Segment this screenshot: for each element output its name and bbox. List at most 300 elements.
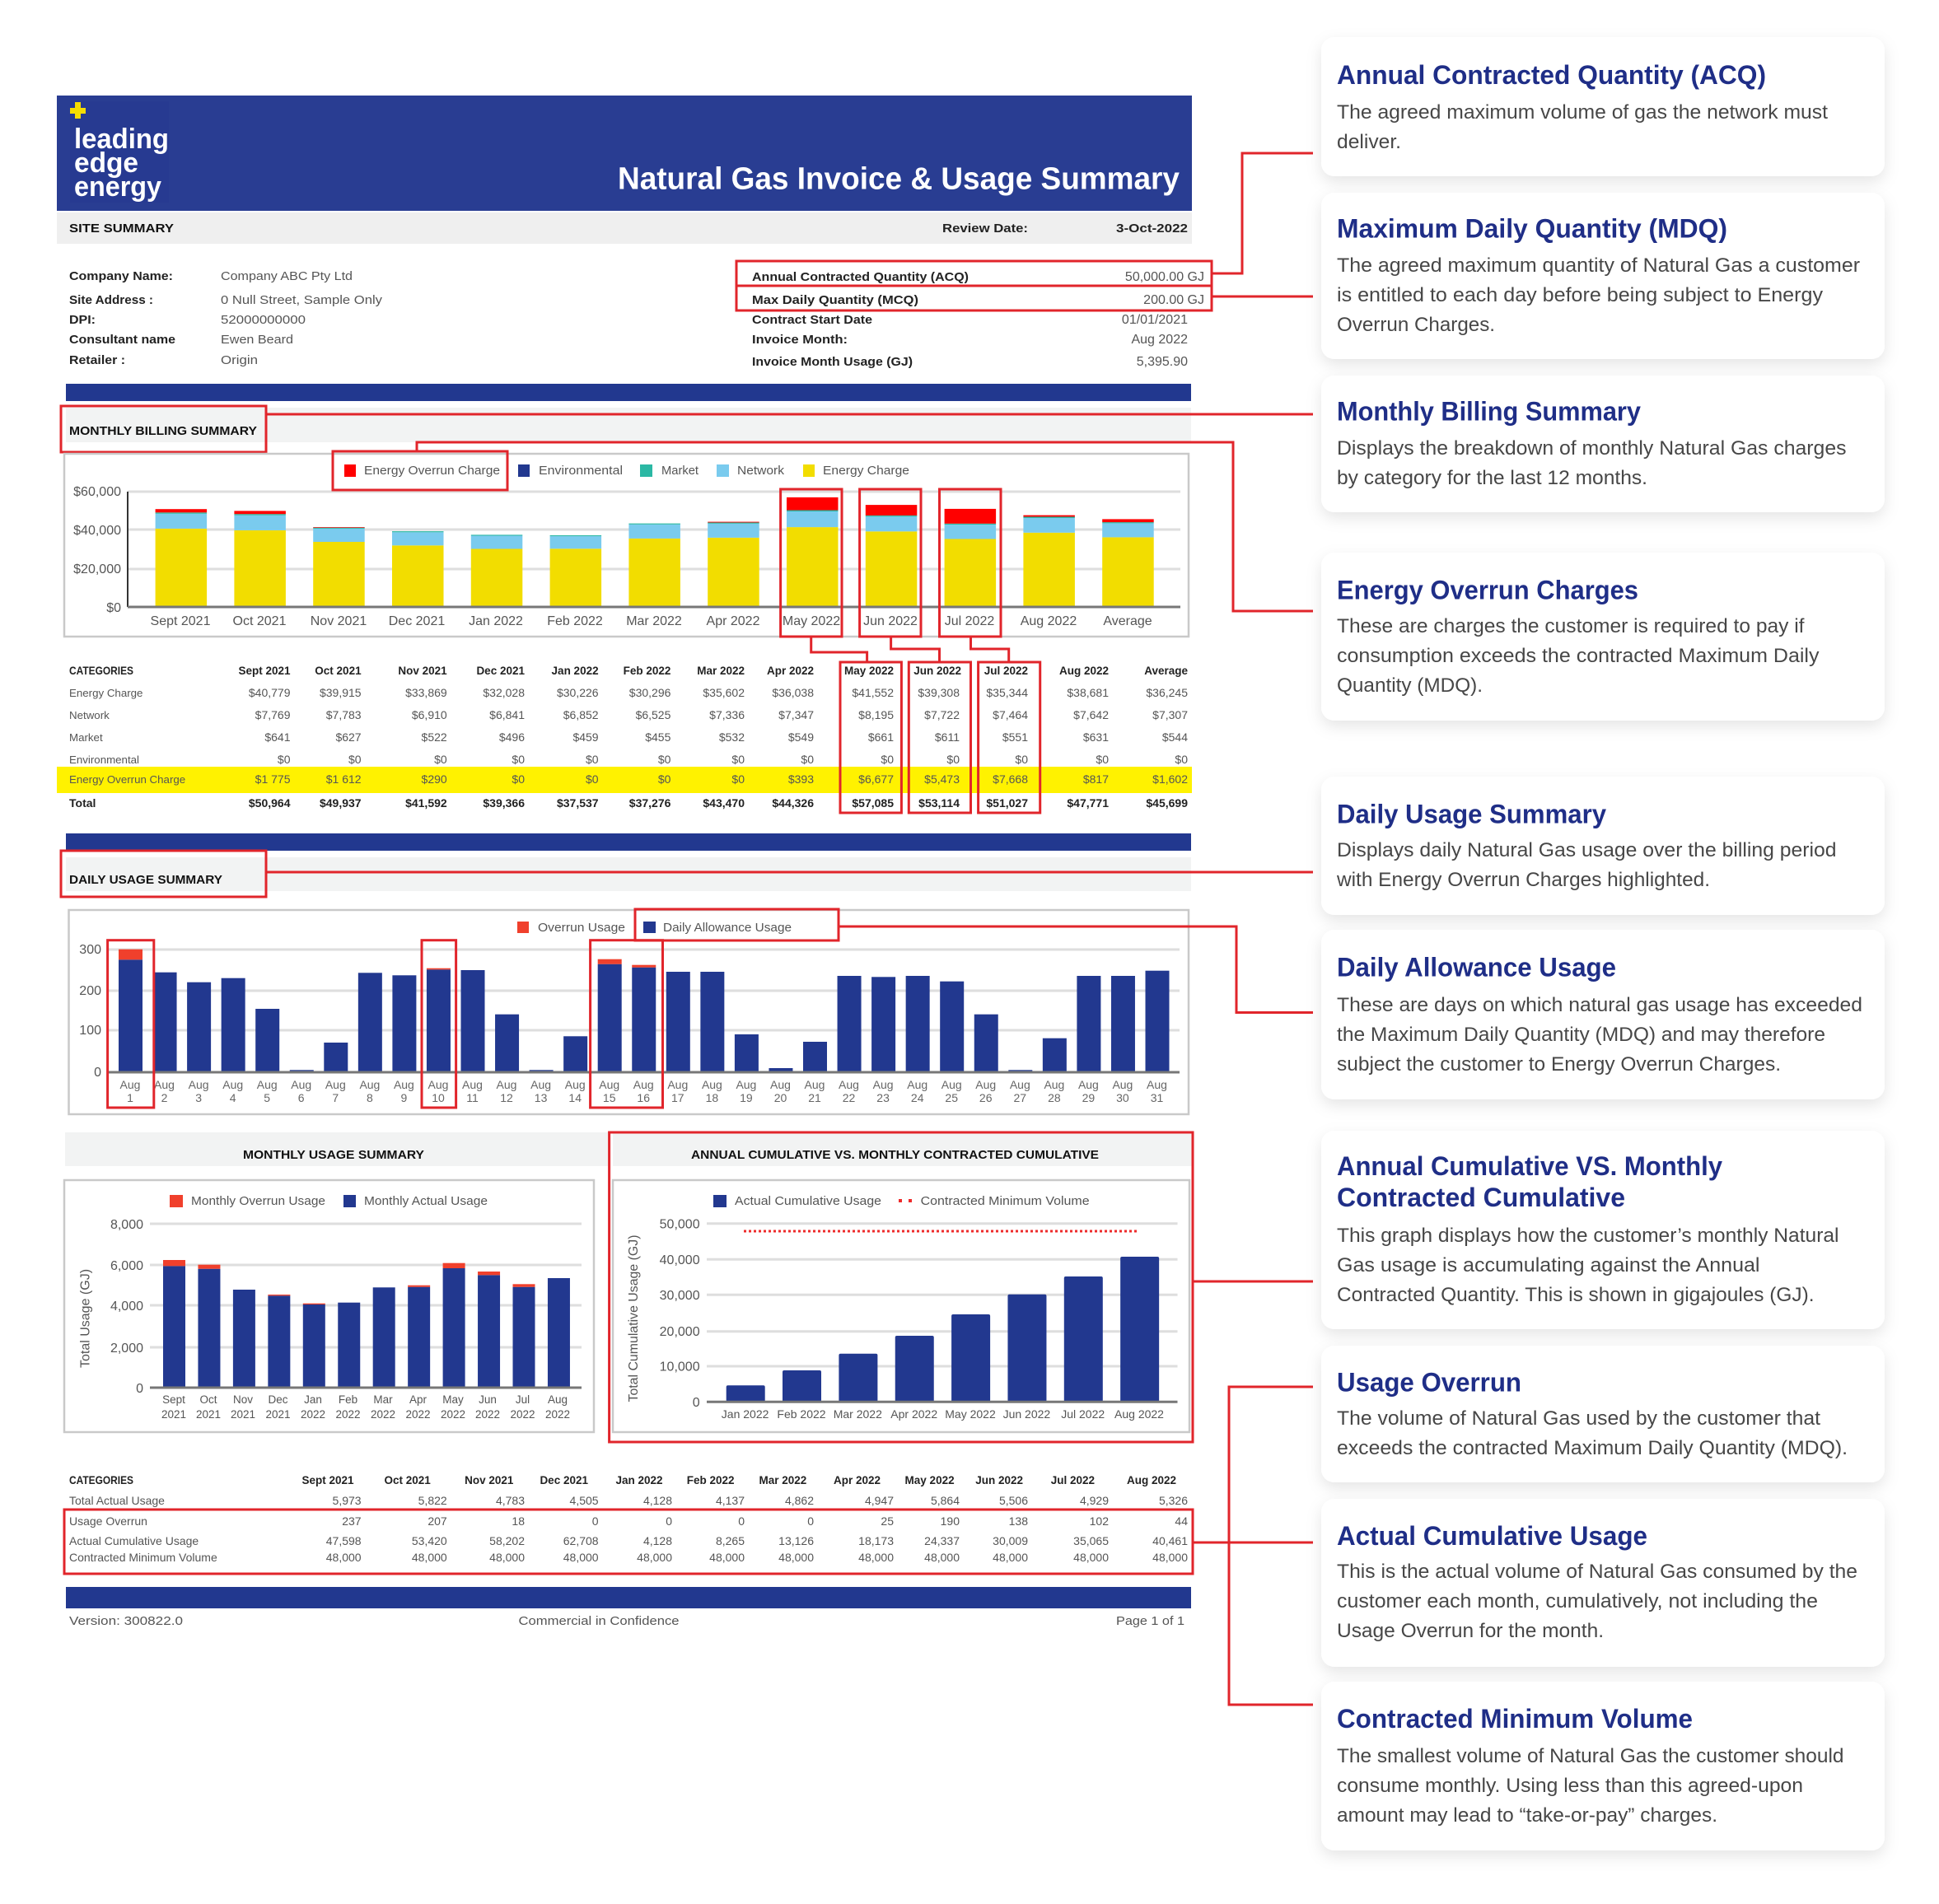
- row: environmental: [69, 753, 1188, 766]
- card: annual cumulative vs monthly contracted cumulative: [1321, 1131, 1885, 1329]
- market bars: [156, 511, 1154, 536]
- billing chart y axis labels: $60,000: [73, 485, 121, 499]
- daily chart x axis labels: 11: [466, 1091, 479, 1104]
- card: energy overrun charges: [1321, 553, 1885, 721]
- row: total: $51,027: [986, 796, 1028, 810]
- card: daily usage summary: with Energy Overrun Charges highlighted.: [1336, 869, 1710, 891]
- row: contracted minimum volume: 48,000: [637, 1551, 672, 1564]
- daily chart x axis labels: Aug: [1010, 1078, 1030, 1091]
- monthly usage x axis labels: Feb: [339, 1393, 357, 1406]
- row: usage overrun: 25: [881, 1514, 894, 1528]
- row: energy overrun charge: $1,602: [1152, 772, 1188, 786]
- site details: left column: 0 Null Street, Sample Only: [221, 293, 383, 307]
- billing table header row: Aug 2022: [1059, 665, 1109, 677]
- daily usage summary heading: [61, 851, 1191, 897]
- daily allowance usage bars: [119, 959, 1170, 1072]
- billing table header row: Average: [1144, 665, 1188, 677]
- row: network: $7,464: [993, 708, 1028, 721]
- billing chart x axis labels: Average: [1103, 614, 1152, 628]
- daily chart x axis labels: Aug: [120, 1078, 140, 1091]
- usage table header row: Apr 2022: [834, 1474, 881, 1486]
- chart: daily usage bars: [69, 910, 1189, 1114]
- cumulative x axis labels: Feb 2022: [777, 1407, 826, 1421]
- daily chart x axis labels: Aug: [1147, 1078, 1167, 1091]
- row: energy charge: $36,038: [772, 686, 814, 699]
- row: energy charge: Energy Charge: [69, 687, 143, 699]
- daily chart x axis labels: 24: [911, 1091, 924, 1104]
- daily chart x axis labels: Aug: [736, 1078, 756, 1091]
- logo: leading edge energy: leading: [74, 124, 169, 155]
- contracted minimum volume dotted line: [744, 1230, 1139, 1232]
- row: total actual usage: 4,128: [643, 1494, 672, 1507]
- chart: monthly billing stacked bars: [64, 454, 1189, 637]
- connector: daily usage heading to card: [266, 871, 1313, 873]
- row: total actual usage: 4,137: [716, 1494, 745, 1507]
- site details: right column: Annual Contracted Quantity (ACQ): [752, 270, 969, 284]
- row: network: $6,852: [563, 708, 599, 721]
- billing chart x axis labels: Jun 2022: [863, 614, 918, 628]
- card: daily allowance usage: [1321, 930, 1885, 1099]
- site details: left column: Ewen Beard: [221, 333, 293, 347]
- row: energy charge: $38,681: [1067, 686, 1109, 699]
- card: daily allowance usage: These are days on which natural gas usage has exceeded: [1337, 994, 1862, 1016]
- billing chart x axis labels: Jul 2022: [945, 614, 994, 628]
- row: total: Total: [69, 796, 96, 810]
- cumulative y axis: [627, 1217, 700, 1410]
- cumulative y axis: 0: [693, 1396, 700, 1410]
- daily chart x axis labels: 25: [945, 1091, 958, 1104]
- site summary heading band: 3-Oct-2022: [1116, 222, 1188, 236]
- row: actual cumulative usage: Actual Cumulative Usage: [69, 1534, 199, 1547]
- row: network: $7,307: [1152, 708, 1188, 721]
- daily chart x axis labels: 16: [637, 1091, 650, 1104]
- row: contracted minimum volume: Contracted Minimum Volume: [69, 1551, 217, 1564]
- billing table header row: Oct 2021: [315, 665, 362, 677]
- cumulative legend: Actual Cumulative Usage: [735, 1194, 881, 1208]
- row: total actual usage: 5,822: [418, 1494, 447, 1507]
- daily chart x axis labels: Aug: [907, 1078, 927, 1091]
- row: network: $7,336: [709, 708, 745, 721]
- daily chart y axis labels: 0: [94, 1066, 101, 1080]
- daily chart x axis labels: Aug: [770, 1078, 791, 1091]
- card: usage overrun: exceeds the contracted Maximum Daily Quantity (MDQ).: [1337, 1437, 1848, 1459]
- site details: right column: 01/01/2021: [1122, 313, 1188, 327]
- footer: Version: 300822.0: [69, 1614, 183, 1628]
- card: monthly billing summary: by category for the last 12 months.: [1337, 467, 1647, 489]
- daily chart y axis labels: 100: [79, 1024, 101, 1038]
- row: total: $39,366: [483, 796, 525, 810]
- energy overrun bars: [156, 497, 1154, 528]
- daily chart x axis labels: 10: [432, 1091, 445, 1104]
- row: environmental: $0: [512, 753, 525, 766]
- site details: right column: 200.00 GJ: [1143, 293, 1204, 307]
- row: energy charge: $41,552: [852, 686, 894, 699]
- row: environmental: $0: [434, 753, 447, 766]
- row: usage overrun: 0: [666, 1514, 672, 1528]
- connector arrows: May to Jul chart columns to table columns: [811, 637, 1009, 662]
- billing chart legend: Network: [737, 464, 785, 478]
- billing chart x axis labels: May 2022: [783, 614, 840, 628]
- cumulative y axis: Total Cumulative Usage (GJ): [627, 1235, 641, 1402]
- row: network: $6,525: [636, 708, 671, 721]
- card: actual cumulative usage: This is the actual volume of Natural Gas consumed by the: [1337, 1561, 1857, 1583]
- site details: right column: Aug 2022: [1131, 333, 1188, 347]
- cumulative x axis labels: Mar 2022: [834, 1407, 882, 1421]
- billing chart y axis labels: $20,000: [73, 562, 121, 576]
- card: actual cumulative usage: Actual Cumulative Usage: [1337, 1521, 1647, 1551]
- footer: [69, 1614, 1184, 1628]
- row: total: $50,964: [249, 796, 291, 810]
- row: contracted minimum volume: 48,000: [489, 1551, 525, 1564]
- card: contracted minimum volume: [1321, 1682, 1885, 1850]
- daily chart x axis labels: Aug: [257, 1078, 278, 1091]
- row: market: $631: [1083, 730, 1109, 744]
- billing chart legend: Market: [661, 464, 699, 478]
- row: market: $496: [499, 730, 525, 744]
- billing table header row: Feb 2022: [624, 665, 670, 677]
- monthly usage y axis: 6,000: [110, 1259, 143, 1273]
- row: actual cumulative usage: 47,598: [326, 1534, 362, 1547]
- card: annual cumulative vs monthly contracted cumulative: Contracted Quantity. This is shown in gigajoules (GJ).: [1337, 1284, 1814, 1306]
- row: energy charge: $40,779: [249, 686, 291, 699]
- card: maximum daily quantity: is entitled to each day before being subject to Energy: [1337, 284, 1823, 306]
- billing chart y axis labels: [73, 485, 121, 615]
- card: daily usage summary: Displays daily Natural Gas usage over the billing period: [1337, 839, 1837, 861]
- monthly usage x axis labels: May: [442, 1393, 464, 1406]
- row: environmental: $0: [1096, 753, 1109, 766]
- row: energy charge: $35,344: [986, 686, 1028, 699]
- row: environmental: $0: [278, 753, 291, 766]
- monthly usage x axis labels: 2022: [301, 1408, 325, 1421]
- card: usage overrun: [1321, 1346, 1885, 1482]
- site details: right column: [752, 270, 1204, 369]
- row: market: $549: [788, 730, 814, 744]
- site details: right column: Invoice Month:: [752, 333, 848, 347]
- row: actual cumulative usage: 13,126: [778, 1534, 814, 1547]
- row: environmental: $0: [731, 753, 745, 766]
- usage table header row: Jul 2022: [1051, 1474, 1095, 1486]
- cumulative y axis: 50,000: [660, 1217, 700, 1232]
- site summary heading band: [57, 212, 1192, 244]
- daily chart x axis labels: Aug: [1078, 1078, 1099, 1091]
- row: environmental: $0: [586, 753, 599, 766]
- row: actual cumulative usage: 53,420: [412, 1534, 447, 1547]
- row: total actual usage: 5,326: [1159, 1494, 1188, 1507]
- daily chart x axis labels: 23: [876, 1091, 890, 1104]
- site details: right column: 50,000.00 GJ: [1125, 270, 1204, 284]
- logo: leading edge energy: [70, 101, 169, 203]
- row: network: $7,722: [924, 708, 960, 721]
- daily chart x axis labels: Aug: [873, 1078, 894, 1091]
- monthly usage legend: Monthly Actual Usage: [364, 1194, 488, 1208]
- monthly billing summary heading: MONTHLY BILLING SUMMARY: [69, 424, 257, 438]
- row: market: $459: [572, 730, 599, 744]
- monthly usage heading: [65, 1132, 608, 1166]
- card: usage overrun: Usage Overrun: [1337, 1367, 1521, 1397]
- monthly usage x axis labels: Jun: [479, 1393, 497, 1406]
- site summary heading band: Review Date:: [942, 222, 1028, 236]
- row: total actual usage: 5,973: [333, 1494, 362, 1507]
- monthly usage x axis labels: 2022: [335, 1408, 361, 1421]
- row: contracted minimum volume: 48,000: [778, 1551, 814, 1564]
- daily chart x axis labels: Aug: [222, 1078, 243, 1091]
- row: total: $45,699: [1146, 796, 1188, 810]
- row: contracted minimum volume: 48,000: [412, 1551, 447, 1564]
- row: total actual usage: 4,929: [1080, 1494, 1109, 1507]
- monthly overrun usage bars: [163, 1260, 535, 1304]
- row: energy charge: $32,028: [483, 686, 525, 699]
- card: contracted minimum volume: amount may lead to “take-or-pay” charges.: [1337, 1804, 1717, 1827]
- usage table header row: Feb 2022: [687, 1474, 735, 1486]
- billing chart x axis labels: Apr 2022: [707, 614, 760, 628]
- cumulative legend: [713, 1194, 1090, 1208]
- row: total actual usage: 5,864: [931, 1494, 960, 1507]
- usage table header row: Sept 2021: [301, 1474, 354, 1486]
- billing table header row: Mar 2022: [697, 665, 745, 677]
- monthly usage x axis labels: Jul: [516, 1393, 530, 1406]
- row: total: $37,537: [557, 796, 599, 810]
- row: total actual usage: 4,505: [570, 1494, 599, 1507]
- table: usage categories: [69, 1473, 1188, 1564]
- cumulative heading: [613, 1132, 1192, 1166]
- row: actual cumulative usage: 30,009: [993, 1534, 1028, 1547]
- row: usage overrun: 237: [342, 1514, 362, 1528]
- footer: Commercial in Confidence: [519, 1614, 679, 1628]
- invoice header banner: [57, 96, 1192, 211]
- billing table header row: [69, 664, 1188, 677]
- monthly usage x axis labels: Dec: [268, 1393, 288, 1406]
- row: actual cumulative usage: 40,461: [1152, 1534, 1188, 1547]
- row: market: [69, 730, 1188, 744]
- row: total: $47,771: [1067, 796, 1109, 810]
- row: market: $611: [935, 730, 960, 744]
- row: network: $6,910: [412, 708, 447, 721]
- row: energy charge: $35,602: [703, 686, 745, 699]
- row: actual cumulative usage: 62,708: [563, 1534, 599, 1547]
- row: usage overrun: 0: [807, 1514, 814, 1528]
- connector: cumulative panel to card: [1193, 1280, 1313, 1283]
- row: total: $49,937: [320, 796, 362, 810]
- row: usage overrun: 207: [428, 1514, 447, 1528]
- usage table header row: Jun 2022: [975, 1474, 1023, 1486]
- divider bar 3: [66, 1587, 1191, 1608]
- billing chart legend: Energy Charge: [823, 464, 909, 478]
- site details: left column: Origin: [221, 353, 258, 367]
- billing chart legend: Energy Overrun Charge: [364, 464, 500, 478]
- highlight boxes: May to Jul table columns: [840, 662, 1040, 813]
- row: environmental: Environmental: [69, 754, 139, 766]
- site details: right column: Contract Start Date: [752, 313, 872, 327]
- billing table header row: CATEGORIES: [69, 664, 133, 677]
- site details: left column: Company Name:: [69, 269, 173, 283]
- daily chart x axis labels: Aug: [702, 1078, 722, 1091]
- row: market: $551: [1002, 730, 1028, 744]
- row: energy overrun charge: $6,677: [858, 772, 894, 786]
- card: daily allowance usage: the Maximum Daily Quantity (MDQ) and may therefore: [1337, 1024, 1825, 1046]
- row: actual cumulative usage: 8,265: [716, 1534, 745, 1547]
- cumulative x axis labels: Apr 2022: [890, 1407, 937, 1421]
- row: total actual usage: 4,783: [496, 1494, 525, 1507]
- site details: left column: DPI:: [69, 313, 96, 327]
- daily chart x axis labels: Aug: [497, 1078, 516, 1091]
- card: actual cumulative usage: customer each month, cumulatively, not including the: [1337, 1590, 1818, 1612]
- billing chart x axis labels: Jan 2022: [469, 614, 523, 628]
- row: energy charge: [69, 686, 1188, 699]
- monthly usage x axis labels: 2022: [405, 1408, 431, 1421]
- monthly usage x axis labels: 2022: [441, 1408, 465, 1421]
- billing table header row: Jul 2022: [984, 665, 1028, 677]
- row: network: Network: [69, 709, 110, 721]
- card: energy overrun charges: Quantity (MDQ).: [1337, 674, 1483, 697]
- row: usage overrun: 18: [512, 1514, 525, 1528]
- billing chart x axis labels: [151, 614, 1152, 628]
- highlight band: energy overrun charge row: [57, 767, 1192, 793]
- daily chart legend: Overrun Usage: [538, 921, 625, 935]
- row: usage overrun: 102: [1090, 1514, 1109, 1528]
- monthly usage y axis: 8,000: [110, 1218, 143, 1232]
- monthly usage y axis: [79, 1218, 143, 1396]
- row: total actual usage: [69, 1494, 1188, 1507]
- daily chart x axis labels: Aug: [291, 1078, 311, 1091]
- monthly usage x axis labels: Apr: [409, 1393, 428, 1406]
- row: total: $37,276: [629, 796, 671, 810]
- daily chart x axis labels: 12: [500, 1091, 513, 1104]
- row: environmental: $0: [348, 753, 362, 766]
- row: total: $43,470: [703, 796, 745, 810]
- row: market: $522: [422, 730, 447, 744]
- row: usage overrun: 0: [592, 1514, 599, 1528]
- panel: monthly usage summary: [64, 1132, 608, 1432]
- card: energy overrun charges: These are charges the customer is required to pay if: [1337, 615, 1805, 637]
- card: maximum daily quantity: Maximum Daily Quantity (MDQ): [1337, 214, 1727, 244]
- table: monthly billing categories: [69, 664, 1188, 810]
- card: annual contracted quantity: [1321, 37, 1885, 176]
- row: energy overrun charge: $0: [731, 772, 745, 786]
- card: daily allowance usage: Daily Allowance Usage: [1337, 952, 1616, 982]
- billing table header row: Apr 2022: [767, 665, 814, 677]
- card: energy overrun charges: consumption exceeds the contracted Maximum Daily: [1337, 645, 1819, 667]
- row: usage overrun: 138: [1009, 1514, 1028, 1528]
- usage table header row: Oct 2021: [385, 1474, 431, 1486]
- card: daily allowance usage: subject the customer to Energy Overrun Charges.: [1337, 1053, 1781, 1076]
- daily chart x axis labels: 2: [161, 1091, 168, 1104]
- row: energy charge: $36,245: [1146, 686, 1188, 699]
- daily chart x axis labels: 4: [230, 1091, 236, 1104]
- row: environmental: $0: [946, 753, 960, 766]
- cumulative heading: ANNUAL CUMULATIVE VS. MONTHLY CONTRACTED CUMULATIVE: [691, 1148, 1099, 1162]
- site details: right column: Max Daily Quantity (MCQ): [752, 293, 918, 307]
- daily chart x axis labels: Aug: [530, 1078, 551, 1091]
- daily chart legend: [517, 921, 792, 935]
- row: network: [69, 708, 1188, 721]
- usage table header row: CATEGORIES: [69, 1473, 133, 1486]
- daily chart x axis labels: 29: [1082, 1091, 1095, 1104]
- row: usage overrun: Usage Overrun: [69, 1514, 147, 1528]
- cumulative x axis labels: Jan 2022: [722, 1407, 769, 1421]
- row: actual cumulative usage: [69, 1534, 1188, 1547]
- daily chart x axis labels: Aug: [941, 1078, 962, 1091]
- daily chart x axis labels: 13: [535, 1091, 548, 1104]
- site details: right column: 5,395.90: [1137, 355, 1188, 369]
- daily chart x axis labels: 28: [1048, 1091, 1061, 1104]
- row: energy overrun charge: $817: [1083, 772, 1109, 786]
- billing chart x axis labels: Nov 2021: [311, 614, 367, 628]
- card: actual cumulative usage: [1321, 1499, 1885, 1667]
- row: usage overrun: [69, 1514, 1188, 1528]
- row: total actual usage: 5,506: [999, 1494, 1028, 1507]
- daily chart x axis labels: Aug: [633, 1078, 654, 1091]
- daily chart x axis labels: 1: [127, 1091, 133, 1104]
- daily chart x axis labels: Aug: [154, 1078, 175, 1091]
- row: network: $7,769: [255, 708, 291, 721]
- row: total: $57,085: [852, 796, 894, 810]
- billing table header row: May 2022: [844, 665, 894, 677]
- card: annual cumulative vs monthly contracted cumulative: Gas usage is accumulating against the Annual: [1337, 1254, 1759, 1276]
- daily chart x axis labels: 3: [195, 1091, 202, 1104]
- row: actual cumulative usage: 35,065: [1073, 1534, 1109, 1547]
- row: environmental: $0: [1015, 753, 1028, 766]
- card: usage overrun: The volume of Natural Gas used by the customer that: [1337, 1407, 1820, 1430]
- row: contracted minimum volume: 48,000: [1073, 1551, 1109, 1564]
- usage table header row: Aug 2022: [1127, 1474, 1176, 1486]
- row: energy overrun charge: [69, 772, 1188, 786]
- card: annual cumulative vs monthly contracted cumulative: This graph displays how the customer’s monthly Natural: [1337, 1225, 1839, 1247]
- connector: monthly billing heading to card: [266, 413, 1313, 415]
- usage table header row: [69, 1473, 1176, 1486]
- daily chart x axis labels: Aug: [839, 1078, 859, 1091]
- divider bar 2: [66, 833, 1191, 851]
- daily chart x axis labels: Aug: [975, 1078, 996, 1091]
- card: contracted minimum volume: Contracted Minimum Volume: [1337, 1704, 1693, 1734]
- energy charge bars: [156, 527, 1154, 607]
- row: environmental: $0: [801, 753, 814, 766]
- daily chart x axis labels: Aug: [189, 1078, 209, 1091]
- cumulative y axis: 40,000: [660, 1253, 700, 1267]
- monthly usage x axis labels: 2021: [161, 1408, 186, 1421]
- daily chart x axis labels: 22: [843, 1091, 855, 1104]
- cumulative x axis labels: Jul 2022: [1061, 1407, 1105, 1421]
- daily chart x axis labels: 5: [264, 1091, 270, 1104]
- row: network: $6,841: [489, 708, 525, 721]
- monthly usage x axis labels: 2021: [265, 1408, 291, 1421]
- logo: leading edge energy: edge: [74, 147, 138, 179]
- row: energy overrun charge: $1 612: [326, 772, 362, 786]
- row: contracted minimum volume: 48,000: [993, 1551, 1028, 1564]
- daily chart x axis labels: 14: [568, 1091, 582, 1104]
- daily chart x axis labels: 31: [1151, 1091, 1163, 1104]
- billing table header row: Jan 2022: [552, 665, 599, 677]
- cumulative y axis: 10,000: [660, 1360, 700, 1374]
- billing chart x axis labels: Feb 2022: [547, 614, 603, 628]
- row: market: $627: [335, 730, 362, 744]
- row: energy overrun charge: $7,668: [993, 772, 1028, 786]
- monthly usage x axis labels: 2022: [475, 1408, 500, 1421]
- card: maximum daily quantity: The agreed maximum quantity of Natural Gas a customer: [1337, 254, 1860, 277]
- daily usage summary heading: DAILY USAGE SUMMARY: [69, 873, 222, 887]
- billing table header row: Nov 2021: [398, 665, 447, 677]
- row: market: $544: [1162, 730, 1188, 744]
- daily chart x axis labels: Aug: [565, 1078, 586, 1091]
- billing chart legend: Environmental: [539, 464, 623, 478]
- card: annual cumulative vs monthly contracted cumulative: Annual Cumulative VS. Monthly: [1337, 1151, 1722, 1181]
- cumulative y axis: 30,000: [660, 1289, 700, 1303]
- row: contracted minimum volume: 48,000: [858, 1551, 894, 1564]
- daily chart x axis labels: 19: [740, 1091, 753, 1104]
- highlight boxes: overrun days and daily legend: [108, 909, 839, 1108]
- row: network: $7,783: [326, 708, 362, 721]
- monthly usage x axis labels: 2021: [196, 1408, 221, 1421]
- row: energy charge: $39,915: [320, 686, 362, 699]
